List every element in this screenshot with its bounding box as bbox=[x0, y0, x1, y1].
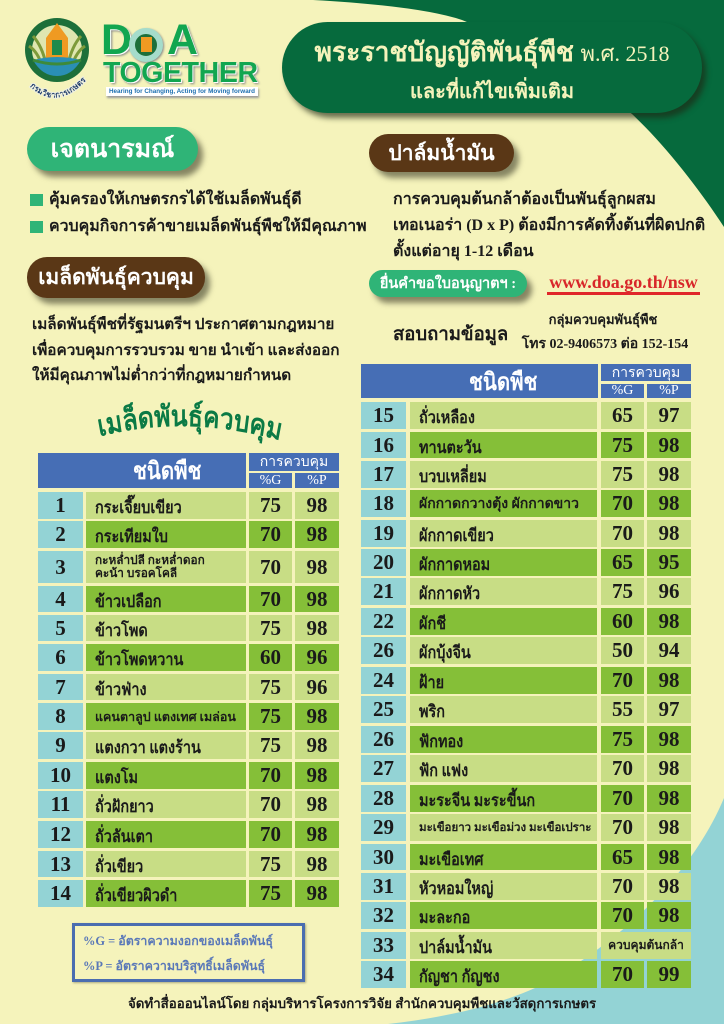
paragraph: controlled seeds: ให้มีคุณภาพไม่ต่ำกว่าที่กฎหมายกำหนด bbox=[32, 367, 291, 384]
row 20: 95 bbox=[658, 550, 680, 574]
row 10: 70 bbox=[260, 763, 281, 787]
table header: %G: %G bbox=[612, 383, 633, 398]
table header: %G bbox=[249, 473, 292, 488]
row 9 bbox=[38, 732, 339, 759]
row 3: กะหล่ำปลี กะหล่ำดอก bbox=[95, 553, 205, 567]
bullet 1: คุ้มครองให้เกษตรกรได้ใช้เมล็ดพันธุ์ดี bbox=[49, 191, 302, 208]
row 10: 98 bbox=[306, 763, 328, 787]
table left bbox=[38, 453, 339, 907]
legend %P: %P = อัตราความบริสุทธิ์เมล็ดพันธุ์ bbox=[83, 959, 265, 973]
row 24: 70 bbox=[612, 668, 633, 692]
heading pill: oil palm bbox=[369, 134, 514, 172]
row 22: 98 bbox=[658, 609, 680, 633]
contact heading: สอบถามข้อมูล bbox=[393, 325, 508, 345]
row 3: 3 bbox=[55, 554, 66, 578]
row 16 bbox=[361, 432, 691, 458]
row 1: 1 bbox=[55, 493, 66, 517]
row 2: กระเทียมใบ bbox=[95, 527, 168, 546]
row 32 bbox=[361, 902, 691, 929]
row 22: 22 bbox=[373, 609, 394, 633]
row 26 (as printed): 26 bbox=[373, 638, 394, 662]
row 1 bbox=[38, 492, 339, 519]
row 26: 98 bbox=[658, 727, 680, 751]
table header: %P bbox=[295, 473, 339, 488]
row 2 bbox=[38, 521, 339, 548]
row 24: 24 bbox=[373, 668, 394, 692]
bullet list: intent bbox=[30, 188, 367, 236]
row 26: 75 bbox=[612, 727, 633, 751]
heading pill: oil palm: ปาล์มน้ำมัน bbox=[388, 140, 495, 164]
row 33: 33 bbox=[373, 933, 394, 957]
logo: department seal bbox=[25, 18, 89, 99]
row 27 bbox=[361, 755, 691, 782]
row 21 bbox=[361, 578, 691, 605]
table header: plant type bbox=[38, 453, 246, 488]
row 14: 14 bbox=[50, 881, 71, 905]
table header: plant type: ชนิดพืช bbox=[133, 459, 201, 485]
row 31: หัวหอมใหญ่ bbox=[419, 879, 493, 898]
row 21: 96 bbox=[658, 579, 680, 603]
row 32: 32 bbox=[373, 903, 394, 927]
row 20: ผักกาดหอม bbox=[419, 555, 490, 574]
row 30: มะเขือเทศ bbox=[419, 850, 483, 868]
row 4: 70 bbox=[260, 586, 281, 610]
heading pill: intent bbox=[27, 127, 198, 171]
row 25 bbox=[361, 696, 691, 723]
heading pill: controlled seeds bbox=[27, 257, 205, 298]
table header: plant type bbox=[361, 364, 598, 398]
row 33: ควบคุมต้นกล้า bbox=[608, 938, 684, 952]
row 34: 70 bbox=[612, 962, 633, 986]
row 13 bbox=[38, 851, 339, 877]
row 11: 98 bbox=[306, 792, 328, 816]
row 30: 65 bbox=[612, 844, 633, 868]
row 9: แตงกวา แตงร้าน bbox=[95, 738, 201, 757]
table header: control: การควบคุม bbox=[612, 366, 680, 380]
row 16: 16 bbox=[373, 432, 394, 456]
row 26: ฟักทอง bbox=[419, 732, 463, 751]
paragraph: controlled seeds: เมล็ดพันธุ์พืชที่รัฐมนตรีฯ ประกาศตามกฎหมาย bbox=[32, 316, 334, 333]
row 1: กระเจี๊ยบเขียว bbox=[95, 498, 182, 517]
row 10 bbox=[38, 762, 339, 789]
row 27: 98 bbox=[658, 756, 680, 780]
row 16: ทานตะวัน bbox=[419, 438, 482, 456]
title banner bbox=[282, 22, 702, 113]
row 9: 9 bbox=[55, 733, 66, 757]
row 21: 75 bbox=[612, 579, 633, 603]
row 29 bbox=[361, 814, 691, 841]
row 19: 19 bbox=[373, 521, 394, 545]
pill: apply for licence: ยื่นคำขอใบอนุญาตฯ : bbox=[380, 276, 516, 292]
row 17: 98 bbox=[658, 462, 680, 486]
row 20 bbox=[361, 549, 691, 576]
row 30: 30 bbox=[373, 844, 394, 868]
table header: %G bbox=[601, 384, 644, 398]
row 7: ข้าวฟ่าง bbox=[95, 680, 147, 698]
contact group: กลุ่มควบคุมพันธุ์พืช bbox=[549, 312, 657, 327]
row 22: ผักชี bbox=[419, 614, 446, 633]
row 14 bbox=[38, 880, 339, 907]
row 2: 2 bbox=[55, 522, 66, 546]
table header: %P: %P bbox=[307, 472, 327, 488]
row 26 (as printed) bbox=[361, 637, 691, 664]
row 7 bbox=[38, 674, 339, 700]
row 3: 98 bbox=[306, 554, 328, 578]
table right bbox=[361, 364, 691, 988]
row 4: 4 bbox=[55, 586, 66, 610]
row 28: 70 bbox=[612, 786, 633, 810]
legend box bbox=[72, 923, 305, 982]
row 27: 70 bbox=[612, 756, 633, 780]
row 6 bbox=[38, 644, 339, 671]
row 14: ถั่วเขียวผิวดำ bbox=[95, 886, 177, 905]
row 24 bbox=[361, 667, 691, 694]
row 17: 17 bbox=[373, 462, 394, 486]
row 31 bbox=[361, 873, 691, 900]
row 27: ฟัก แฟง bbox=[419, 761, 468, 780]
logo letter A: A bbox=[167, 16, 198, 64]
row 11: ถั่วฝักยาว bbox=[95, 797, 154, 816]
paragraph: oil palm bbox=[393, 188, 705, 260]
row 6: 96 bbox=[306, 645, 328, 669]
row 28: 98 bbox=[658, 786, 680, 810]
contact phone: โทร 02-9406573 ต่อ 152-154 bbox=[522, 337, 688, 352]
row 28: 28 bbox=[373, 786, 394, 810]
row 6: ข้าวโพดหวาน bbox=[95, 650, 183, 669]
row 11 bbox=[38, 791, 339, 818]
row 5: 5 bbox=[55, 616, 66, 640]
row 18: ผักกาดกวางตุ้ง ผักกาดขาว bbox=[419, 496, 579, 512]
row 4 bbox=[38, 586, 339, 612]
row 4: ข้าวเปลือก bbox=[95, 592, 162, 610]
row 18: 18 bbox=[373, 491, 394, 515]
logo: department seal: กรมวิชาการเกษตร bbox=[28, 76, 86, 99]
row 34 bbox=[361, 961, 691, 988]
row 5: 98 bbox=[306, 616, 328, 640]
table header: %P bbox=[647, 384, 691, 398]
row 16: 98 bbox=[658, 432, 680, 456]
row 1: 75 bbox=[260, 493, 281, 517]
paragraph: oil palm: เทอเนอร่า (D x P) ต้องมีการคัดทิ้งต้นที่ผิดปกติ bbox=[393, 217, 705, 234]
row 33: ปาล์มน้ำมัน bbox=[419, 938, 492, 957]
row 8: 98 bbox=[306, 704, 328, 728]
row 5: 75 bbox=[260, 616, 281, 640]
row 25: พริก bbox=[419, 702, 445, 721]
row 26 (as printed): 94 bbox=[658, 638, 680, 662]
row 21: ผักกาดหัว bbox=[419, 584, 480, 603]
row 29: 70 bbox=[612, 815, 633, 839]
row 7: 7 bbox=[55, 674, 66, 698]
row 18: 70 bbox=[612, 491, 633, 515]
row 25: 55 bbox=[612, 697, 633, 721]
row 28 bbox=[361, 785, 691, 812]
table header: control bbox=[601, 364, 691, 381]
row 34: 99 bbox=[658, 962, 680, 986]
row 32: มะละกอ bbox=[419, 908, 470, 927]
row 20: 65 bbox=[612, 550, 633, 574]
row 1: 98 bbox=[306, 493, 328, 517]
row 8: 75 bbox=[260, 704, 281, 728]
row 17: บวบเหลี่ยม bbox=[419, 467, 487, 486]
row 15: 97 bbox=[658, 403, 680, 427]
row 15: 65 bbox=[612, 403, 633, 427]
row 6: 60 bbox=[260, 645, 281, 669]
table header: %G: %G bbox=[260, 472, 281, 488]
title line 2: และที่แก้ไขเพิ่มเติม bbox=[410, 81, 574, 103]
row 19 bbox=[361, 520, 691, 547]
row 7: 75 bbox=[260, 674, 281, 698]
row 20: 20 bbox=[373, 550, 394, 574]
row 22 bbox=[361, 608, 691, 635]
logo word TOGETHER: TOGETHER bbox=[103, 57, 258, 89]
logo emblem O bbox=[129, 28, 163, 62]
row 19: 70 bbox=[612, 521, 633, 545]
row 33 bbox=[361, 932, 691, 959]
link: www.doa.go.th/nsw bbox=[549, 272, 698, 292]
row 32: 98 bbox=[658, 903, 680, 927]
row 5 bbox=[38, 615, 339, 641]
row 12: 98 bbox=[306, 822, 328, 846]
logo: DOA Together bbox=[101, 16, 260, 100]
row 19: 98 bbox=[658, 521, 680, 545]
row 24: ฝ้าย bbox=[419, 673, 444, 692]
row 17: 75 bbox=[612, 462, 633, 486]
row 28: มะระจีน มะระขี้นก bbox=[419, 791, 535, 810]
row 3: 70 bbox=[260, 554, 281, 578]
row 12: ถั่วลันเตา bbox=[95, 827, 153, 846]
row 29: มะเขือยาว มะเขือม่วง มะเขือเปราะ bbox=[419, 822, 591, 834]
row 26: 26 bbox=[373, 727, 394, 751]
row 13: 75 bbox=[260, 852, 281, 876]
bullet 2: ควบคุมกิจการค้าขายเมล็ดพันธุ์พืชให้มีคุณภาพ bbox=[49, 218, 367, 235]
paragraph: oil palm: การควบคุมต้นกล้าต้องเป็นพันธุ์ลูกผสม bbox=[393, 191, 656, 208]
row 8: 8 bbox=[55, 704, 66, 728]
table header: control: การควบคุม bbox=[260, 455, 328, 470]
row 11: 11 bbox=[51, 792, 70, 816]
row 3 bbox=[38, 551, 339, 583]
row 12: 12 bbox=[50, 822, 71, 846]
row 18 bbox=[361, 490, 691, 517]
row 2: 98 bbox=[306, 522, 328, 546]
row 25: 97 bbox=[658, 697, 680, 721]
row 10: แตงโม bbox=[95, 768, 138, 787]
row 31: 70 bbox=[612, 874, 633, 898]
row 26 (as printed): ผักบุ้งจีน bbox=[419, 643, 471, 662]
row 18: 98 bbox=[658, 491, 680, 515]
curved heading: เมล็ดพันธุ์ควบคุม bbox=[98, 400, 282, 444]
row 19: ผักกาดเขียว bbox=[419, 526, 494, 545]
row 17 bbox=[361, 461, 691, 488]
row 10: 10 bbox=[50, 763, 71, 787]
row 24: 98 bbox=[658, 668, 680, 692]
row 13: 98 bbox=[306, 852, 328, 876]
row 4: 98 bbox=[306, 586, 328, 610]
row 25: 25 bbox=[373, 697, 394, 721]
paragraph: oil palm: ตั้งแต่อายุ 1-12 เดือน bbox=[393, 243, 534, 260]
row 9: 98 bbox=[306, 733, 328, 757]
row 30 bbox=[361, 844, 691, 870]
pill: apply for licence bbox=[369, 270, 527, 297]
row 30: 98 bbox=[658, 844, 680, 868]
row 27: 27 bbox=[373, 756, 394, 780]
row 26 (as printed): 50 bbox=[612, 638, 633, 662]
table header: plant type: ชนิดพืช bbox=[469, 370, 538, 396]
title line 1: พระราชบัญญัติพันธุ์พืช พ.ศ. 2518 bbox=[314, 37, 670, 67]
row 16: 75 bbox=[612, 432, 633, 456]
row 22: 60 bbox=[612, 609, 633, 633]
row 14: 98 bbox=[306, 881, 328, 905]
row 8 bbox=[38, 703, 339, 730]
row 32: 70 bbox=[612, 903, 633, 927]
row 15: ถั่วเหลือง bbox=[419, 408, 475, 427]
row 11: 70 bbox=[260, 792, 281, 816]
table header: control bbox=[249, 453, 339, 471]
row 15 bbox=[361, 402, 691, 429]
paragraph: controlled seeds: เพื่อควบคุมการรวบรวม ขาย นำเข้า และส่งออก bbox=[32, 342, 340, 358]
row 7: 96 bbox=[306, 674, 328, 698]
row 8: แคนตาลูป แตงเทศ เมล่อน bbox=[95, 710, 236, 724]
row 13: ถั่วเขียว bbox=[95, 856, 143, 876]
row 14: 75 bbox=[260, 881, 281, 905]
paragraph: controlled seeds bbox=[32, 313, 340, 384]
row 15: 15 bbox=[373, 403, 394, 427]
heading pill: intent: เจตนารมณ์ bbox=[51, 136, 174, 163]
row 31: 31 bbox=[373, 874, 394, 898]
logo tagline: Hearing for Changing, Acting for Moving forward bbox=[109, 88, 255, 95]
row 29: 29 bbox=[373, 815, 394, 839]
footer credit: จัดทำสื่อออนไลน์โดย กลุ่มบริหารโครงการวิจัย สำนักควบคุมพืชและวัสดุการเกษตร bbox=[128, 996, 596, 1011]
row 3: คะน้า บรอคโคลี bbox=[95, 566, 177, 580]
row 5: ข้าวโพด bbox=[95, 620, 148, 640]
table header: %P: %P bbox=[659, 383, 679, 398]
logo letter D: D bbox=[101, 16, 132, 64]
row 21: 21 bbox=[373, 579, 394, 603]
row 12: 70 bbox=[260, 822, 281, 846]
row 34: กัญชา กัญชง bbox=[419, 967, 500, 986]
row 6: 6 bbox=[55, 645, 66, 669]
row 26 bbox=[361, 726, 691, 753]
row 31: 98 bbox=[658, 874, 680, 898]
row 13: 13 bbox=[50, 852, 71, 876]
row 34: 34 bbox=[373, 962, 394, 986]
row 9: 75 bbox=[260, 733, 281, 757]
heading pill: controlled seeds: เมล็ดพันธุ์ควบคุม bbox=[38, 265, 194, 289]
row 12 bbox=[38, 821, 339, 848]
row 29: 98 bbox=[658, 815, 680, 839]
row 2: 70 bbox=[260, 522, 281, 546]
legend %G: %G = อัตราความงอกของเมล็ดพันธุ์ bbox=[83, 934, 273, 948]
